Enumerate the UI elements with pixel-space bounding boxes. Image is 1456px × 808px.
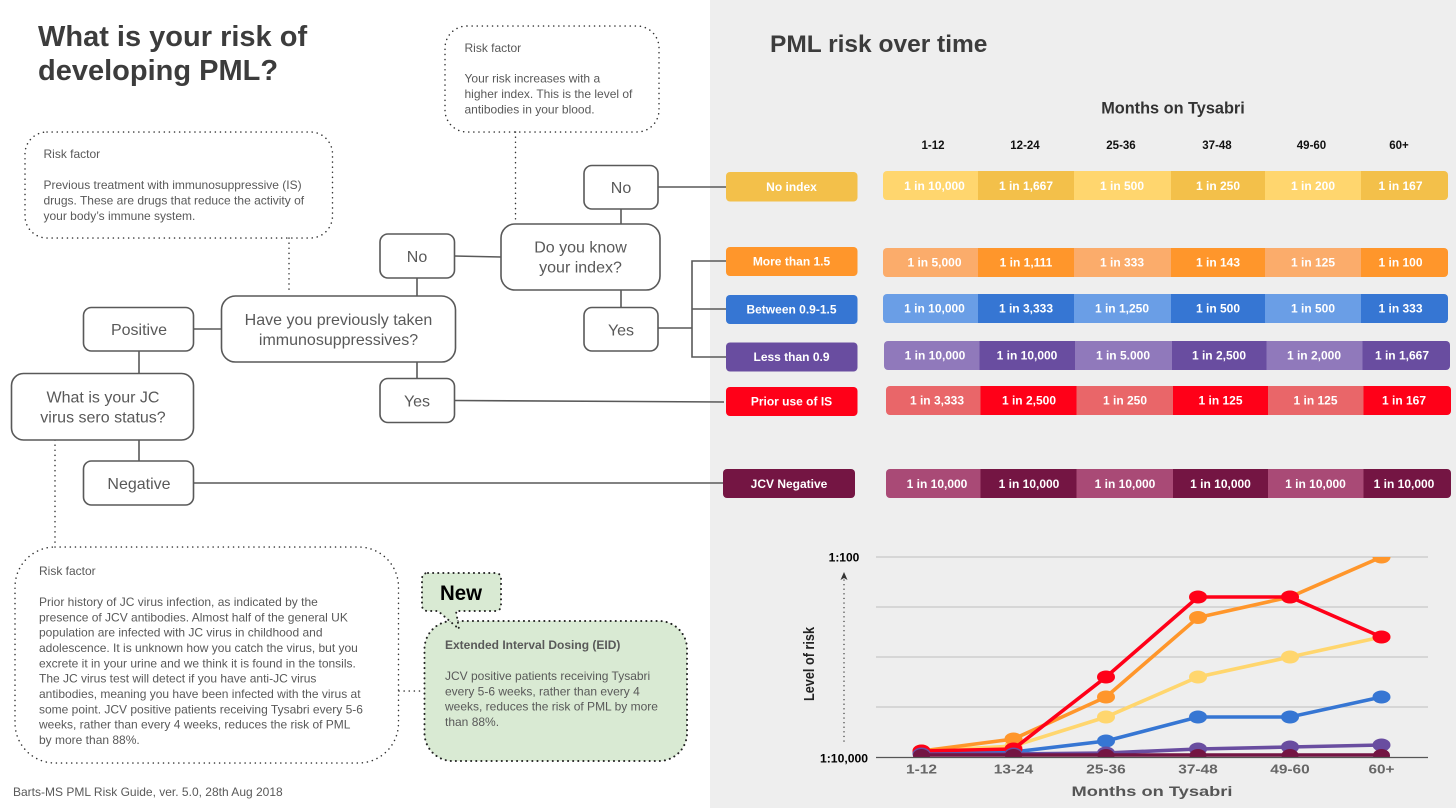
- x axis labels: 1-12: [906, 762, 937, 776]
- table column headers: 12-24: [1010, 140, 1040, 152]
- table column headers: [921, 140, 1409, 152]
- flowchart connectors: [139, 187, 726, 483]
- row: More than 1.5: 1 in 143: [1196, 256, 1240, 270]
- row: Between 0.9-1.5: 1 in 500: [1291, 302, 1335, 316]
- series: more than 1.5: [912, 550, 1390, 758]
- callout: Extended Interval Dosing: JCV positive patients receiving Tysabri: [445, 669, 650, 683]
- row: More than 1.5: 1 in 333: [1100, 256, 1144, 270]
- callout: risk factor, immunosuppressive drugs: Risk factor: [44, 147, 100, 161]
- dotted connectors to risk factor boxes: [55, 132, 516, 691]
- row: More than 1.5: 1 in 5,000: [907, 256, 962, 270]
- flow node: Positive: [84, 308, 194, 351]
- row: JCV Negative: 1 in 10,000: [1285, 477, 1346, 491]
- row: Less than 0.9: [726, 341, 1450, 372]
- x axis title: Months on Tysabri: [1072, 783, 1232, 799]
- row: No index: 1 in 500: [1100, 179, 1144, 193]
- row: Between 0.9-1.5: 1 in 333: [1378, 302, 1423, 316]
- row: No index: 1 in 250: [1196, 179, 1240, 193]
- callout: risk factor, JC virus: Risk factor: [39, 564, 96, 578]
- arrow: increasing risk: [840, 572, 848, 745]
- callout: risk factor, JC virus: some point. JCV positive patients receiving Tysabri every 5-6: [39, 702, 363, 716]
- flow node: No (immunosuppressives): No: [407, 249, 427, 266]
- flow node: No (index): [584, 166, 658, 209]
- heading: PML risk over time: PML risk over time: [770, 31, 987, 58]
- flow node: Positive: Positive: [111, 322, 167, 339]
- callout: risk factor, JC virus: excrete it in your urine and we think it is found in the tonsils.: [39, 656, 356, 670]
- flow node: What is your JC virus sero status?: [12, 374, 194, 440]
- table heading: Months on Tysabri: Months on Tysabri: [1101, 100, 1245, 118]
- x axis labels: [906, 762, 1394, 776]
- y axis top label: 1:100: [829, 550, 860, 564]
- flow node: Negative: Negative: [107, 476, 171, 493]
- row: Prior use of IS: 1 in 2,500: [1002, 394, 1056, 408]
- flow node: No (index): No: [611, 180, 631, 197]
- row: More than 1.5: 1 in 1,111: [1000, 256, 1053, 270]
- row: No index: 1 in 167: [1378, 179, 1423, 193]
- callout: risk factor, immunosuppressive drugs: drugs. These are drugs that reduce the activity of: [44, 194, 305, 208]
- callout: risk factor, index: higher index. This is the level of: [464, 87, 633, 101]
- callout: risk factor, JC virus: by more than 88%.: [39, 733, 140, 747]
- flow node: Do you know your index?: [501, 224, 660, 290]
- callout: risk factor, JC virus: [15, 547, 398, 763]
- callout: Extended Interval Dosing: Extended Interval Dosing (EID): [445, 638, 620, 652]
- line chart: risk over time: [801, 550, 1428, 799]
- row: Between 0.9-1.5: [726, 294, 1448, 324]
- row: Prior use of IS: 1 in 125: [1198, 394, 1243, 408]
- x axis labels: 13-24: [994, 762, 1033, 776]
- table column headers: 37-48: [1202, 140, 1232, 152]
- row: Less than 0.9: 1 in 1,667: [1375, 348, 1429, 362]
- row: Prior use of IS: 1 in 125: [1293, 394, 1338, 408]
- callout: risk factor, index: Your risk increases with a: [464, 72, 600, 86]
- flow node: Yes (immunosuppressives): Yes: [404, 394, 430, 410]
- row: More than 1.5: 1 in 100: [1378, 256, 1423, 270]
- row: Prior use of IS: [726, 386, 1451, 416]
- flow node: What is your JC virus sero status?: virus sero status?: [40, 410, 166, 426]
- callout: risk factor, immunosuppressive drugs: your body’s immune system.: [44, 209, 195, 223]
- row: More than 1.5: More than 1.5: [753, 254, 830, 268]
- callout: risk factor, JC virus: weeks, rather than every 4 weeks, reduces the risk of PML: [38, 718, 351, 732]
- flow node: Have you previously taken immunosuppressives?: Have you previously taken: [245, 312, 432, 329]
- row: No index: No index: [766, 180, 817, 194]
- row: JCV Negative: 1 in 10,000: [1190, 477, 1251, 491]
- y axis title: Level of risk: [801, 626, 818, 701]
- flow node: Do you know your index?: your index?: [539, 260, 622, 276]
- series: less than 0.9: [912, 738, 1390, 757]
- callout: risk factor, immunosuppressive drugs: Previous treatment with immunosuppressive (IS): [44, 178, 302, 192]
- row: Less than 0.9: 1 in 2,000: [1287, 348, 1341, 362]
- row: Between 0.9-1.5: 1 in 500: [1196, 302, 1240, 316]
- row: No index: [726, 171, 1448, 202]
- row: Prior use of IS: Prior use of IS: [751, 394, 832, 408]
- row: JCV Negative: 1 in 10,000: [907, 477, 968, 491]
- callout: Extended Interval Dosing: weeks, reduces the risk of PML by more: [444, 700, 658, 714]
- callout: risk factor, JC virus: The JC virus test will detect if you have anti-JC virus: [39, 672, 316, 686]
- title: developing PML?: [38, 55, 278, 87]
- row: No index: 1 in 1,667: [999, 179, 1053, 193]
- row: Prior use of IS: 1 in 3,333: [910, 394, 964, 408]
- callout: risk factor, JC virus: antibodies, meaning you have been infected with the virus at: [39, 687, 361, 701]
- x axis labels: 25-36: [1086, 762, 1126, 776]
- row: JCV Negative: 1 in 10,000: [1374, 477, 1435, 491]
- callout: risk factor, JC virus: population are infected with JC virus in childhood and: [39, 626, 323, 640]
- row: No index: 1 in 200: [1291, 179, 1335, 193]
- callout: risk factor, JC virus: adolescence. It is unknown how you catch the virus, but you: [39, 641, 358, 655]
- callout: New badge: [422, 573, 501, 629]
- right panel background: [710, 0, 1456, 808]
- callout: risk factor, JC virus: Prior history of JC virus infection, as indicated by the: [39, 595, 318, 609]
- flow node: Do you know your index?: Do you know: [534, 240, 627, 256]
- callout: risk factor, immunosuppressive drugs: [25, 132, 332, 238]
- flow node: Yes (index): [584, 308, 658, 351]
- flow node: Yes (immunosuppressives): [380, 378, 454, 422]
- footer note: Barts-MS PML Risk Guide, ver. 5.0, 28th Aug 2018: [13, 785, 283, 799]
- flow node: Have you previously taken immunosuppressives?: immunosuppressives?: [259, 332, 418, 349]
- series: no index: [912, 630, 1390, 758]
- callout: New badge: New: [440, 582, 483, 605]
- row: Less than 0.9: 1 in 5.000: [1096, 348, 1150, 362]
- x axis labels: 49-60: [1270, 762, 1310, 776]
- row: No index: 1 in 10,000: [904, 179, 965, 193]
- flow node: Yes (index): Yes: [608, 322, 634, 340]
- x axis labels: 60+: [1368, 762, 1394, 776]
- row: JCV Negative: [723, 469, 1451, 498]
- table column headers: 49-60: [1297, 140, 1326, 152]
- callout: risk factor, index: [445, 26, 659, 132]
- row: Prior use of IS: 1 in 167: [1382, 394, 1426, 408]
- row: More than 1.5: 1 in 125: [1291, 256, 1335, 270]
- series: between 0.9-1.5: [912, 690, 1390, 760]
- series: JCV negative: [913, 749, 1390, 757]
- flow node: No (immunosuppressives): [380, 234, 454, 278]
- flow node: Negative: [84, 461, 194, 505]
- y axis bottom label: 1:10,000: [820, 752, 868, 766]
- table column headers: 25-36: [1106, 140, 1136, 152]
- row: Prior use of IS: 1 in 250: [1103, 394, 1147, 408]
- row: Less than 0.9: Less than 0.9: [753, 350, 830, 364]
- flow node: Have you previously taken immunosuppressives?: [222, 296, 456, 362]
- table column headers: 1-12: [921, 140, 945, 152]
- row: JCV Negative: JCV Negative: [751, 477, 828, 491]
- callout: risk factor, index: antibodies in your blood.: [464, 102, 595, 116]
- callout: risk factor, index: Risk factor: [464, 41, 521, 55]
- row: Less than 0.9: 1 in 2,500: [1192, 348, 1246, 362]
- title: What is your risk of: [38, 21, 307, 53]
- table column headers: 60+: [1389, 140, 1409, 152]
- row: More than 1.5: [726, 247, 1448, 277]
- row: JCV Negative: 1 in 10,000: [1095, 477, 1156, 491]
- row: Between 0.9-1.5: 1 in 10,000: [904, 302, 965, 316]
- callout: Extended Interval Dosing: than 88%.: [445, 715, 499, 729]
- x axis labels: 37-48: [1178, 762, 1218, 776]
- callout: risk factor, JC virus: presence of JCV antibodies. Almost half of the general UK: [39, 610, 348, 624]
- flow node: What is your JC virus sero status?: What is your JC: [47, 390, 159, 406]
- row: Between 0.9-1.5: 1 in 3,333: [999, 302, 1053, 316]
- series: prior use of IS: [912, 590, 1390, 758]
- row: Less than 0.9: 1 in 10,000: [905, 348, 966, 362]
- row: JCV Negative: 1 in 10,000: [999, 477, 1060, 491]
- callout: Extended Interval Dosing: every 5-6 weeks, rather than every 4: [445, 684, 640, 698]
- callout: Extended Interval Dosing: [424, 621, 687, 761]
- row: Between 0.9-1.5: Between 0.9-1.5: [746, 302, 837, 316]
- row: Between 0.9-1.5: 1 in 1,250: [1095, 302, 1149, 316]
- row: Less than 0.9: 1 in 10,000: [997, 348, 1058, 362]
